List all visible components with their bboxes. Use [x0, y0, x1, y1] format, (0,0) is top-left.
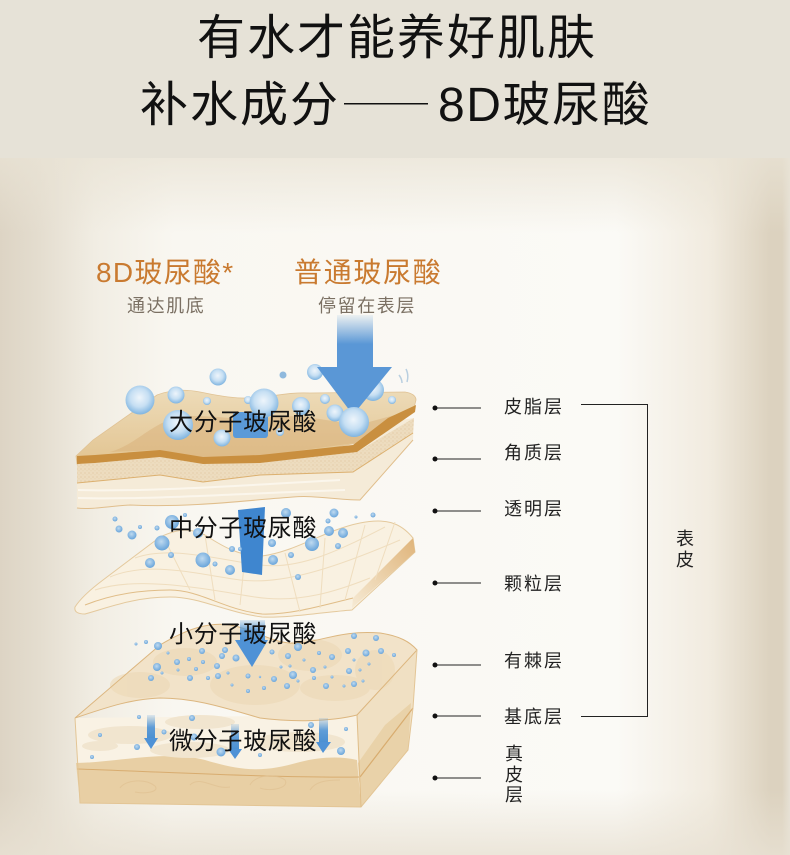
layer captions: 中分子玻尿酸 [169, 515, 317, 542]
title [140, 12, 651, 132]
skin layer 2: mesh sheet [75, 521, 415, 617]
heading: regular hyaluronic acid: 普通玻尿酸 [294, 257, 443, 288]
title: 补水成分 [140, 79, 340, 132]
layer names: 有棘层 [504, 651, 564, 671]
ripple marks [399, 369, 408, 383]
label: epidermis: 皮 [676, 550, 694, 570]
layer names: 真 [505, 744, 525, 764]
layer names: 皮脂层 [504, 397, 564, 417]
skin layer 1: top layered sheet [76, 390, 416, 509]
arrow: main blue arrow [317, 315, 392, 415]
title: 8D玻尿酸 [438, 79, 651, 132]
heading: 8D hyaluronic acid: 8D玻尿酸* [96, 257, 234, 288]
heading: 8D hyaluronic acid [96, 257, 234, 316]
skin layer 3: lower block [75, 624, 417, 807]
leader lines [432, 406, 481, 780]
bubble: at arrow tip [339, 407, 369, 437]
layer captions: 小分子玻尿酸 [169, 621, 317, 648]
bubbles: large molecules [126, 364, 396, 446]
bracket: epidermis [581, 404, 648, 716]
layer names: 基底层 [504, 707, 564, 727]
layer names: 透明层 [504, 499, 564, 519]
title: 有水才能养好肌肤 [197, 12, 597, 65]
bubbles: medium molecules [112, 508, 376, 580]
layer names: 颗粒层 [504, 574, 564, 594]
layer captions [169, 409, 317, 755]
small arrows: deep layer [144, 715, 331, 759]
heading: regular hyaluronic acid [294, 257, 443, 316]
layer names: 皮 [505, 765, 525, 785]
heading: regular hyaluronic acid: 停留在表层 [318, 296, 416, 316]
bubbles: micro molecules [90, 715, 348, 759]
arrow: third layer [235, 620, 268, 667]
layer names: 层 [505, 785, 525, 805]
layer captions: 大分子玻尿酸 [169, 409, 317, 436]
title band [0, 0, 790, 158]
layer names [504, 397, 564, 805]
arrow: second layer [233, 412, 268, 575]
layer names: 角质层 [504, 443, 564, 463]
bubbles: small molecules [134, 633, 396, 693]
heading: 8D hyaluronic acid: 通达肌底 [127, 296, 205, 316]
label: epidermis: 表 [676, 529, 694, 549]
layer captions: 微分子玻尿酸 [169, 728, 317, 755]
label: epidermis [676, 529, 694, 570]
